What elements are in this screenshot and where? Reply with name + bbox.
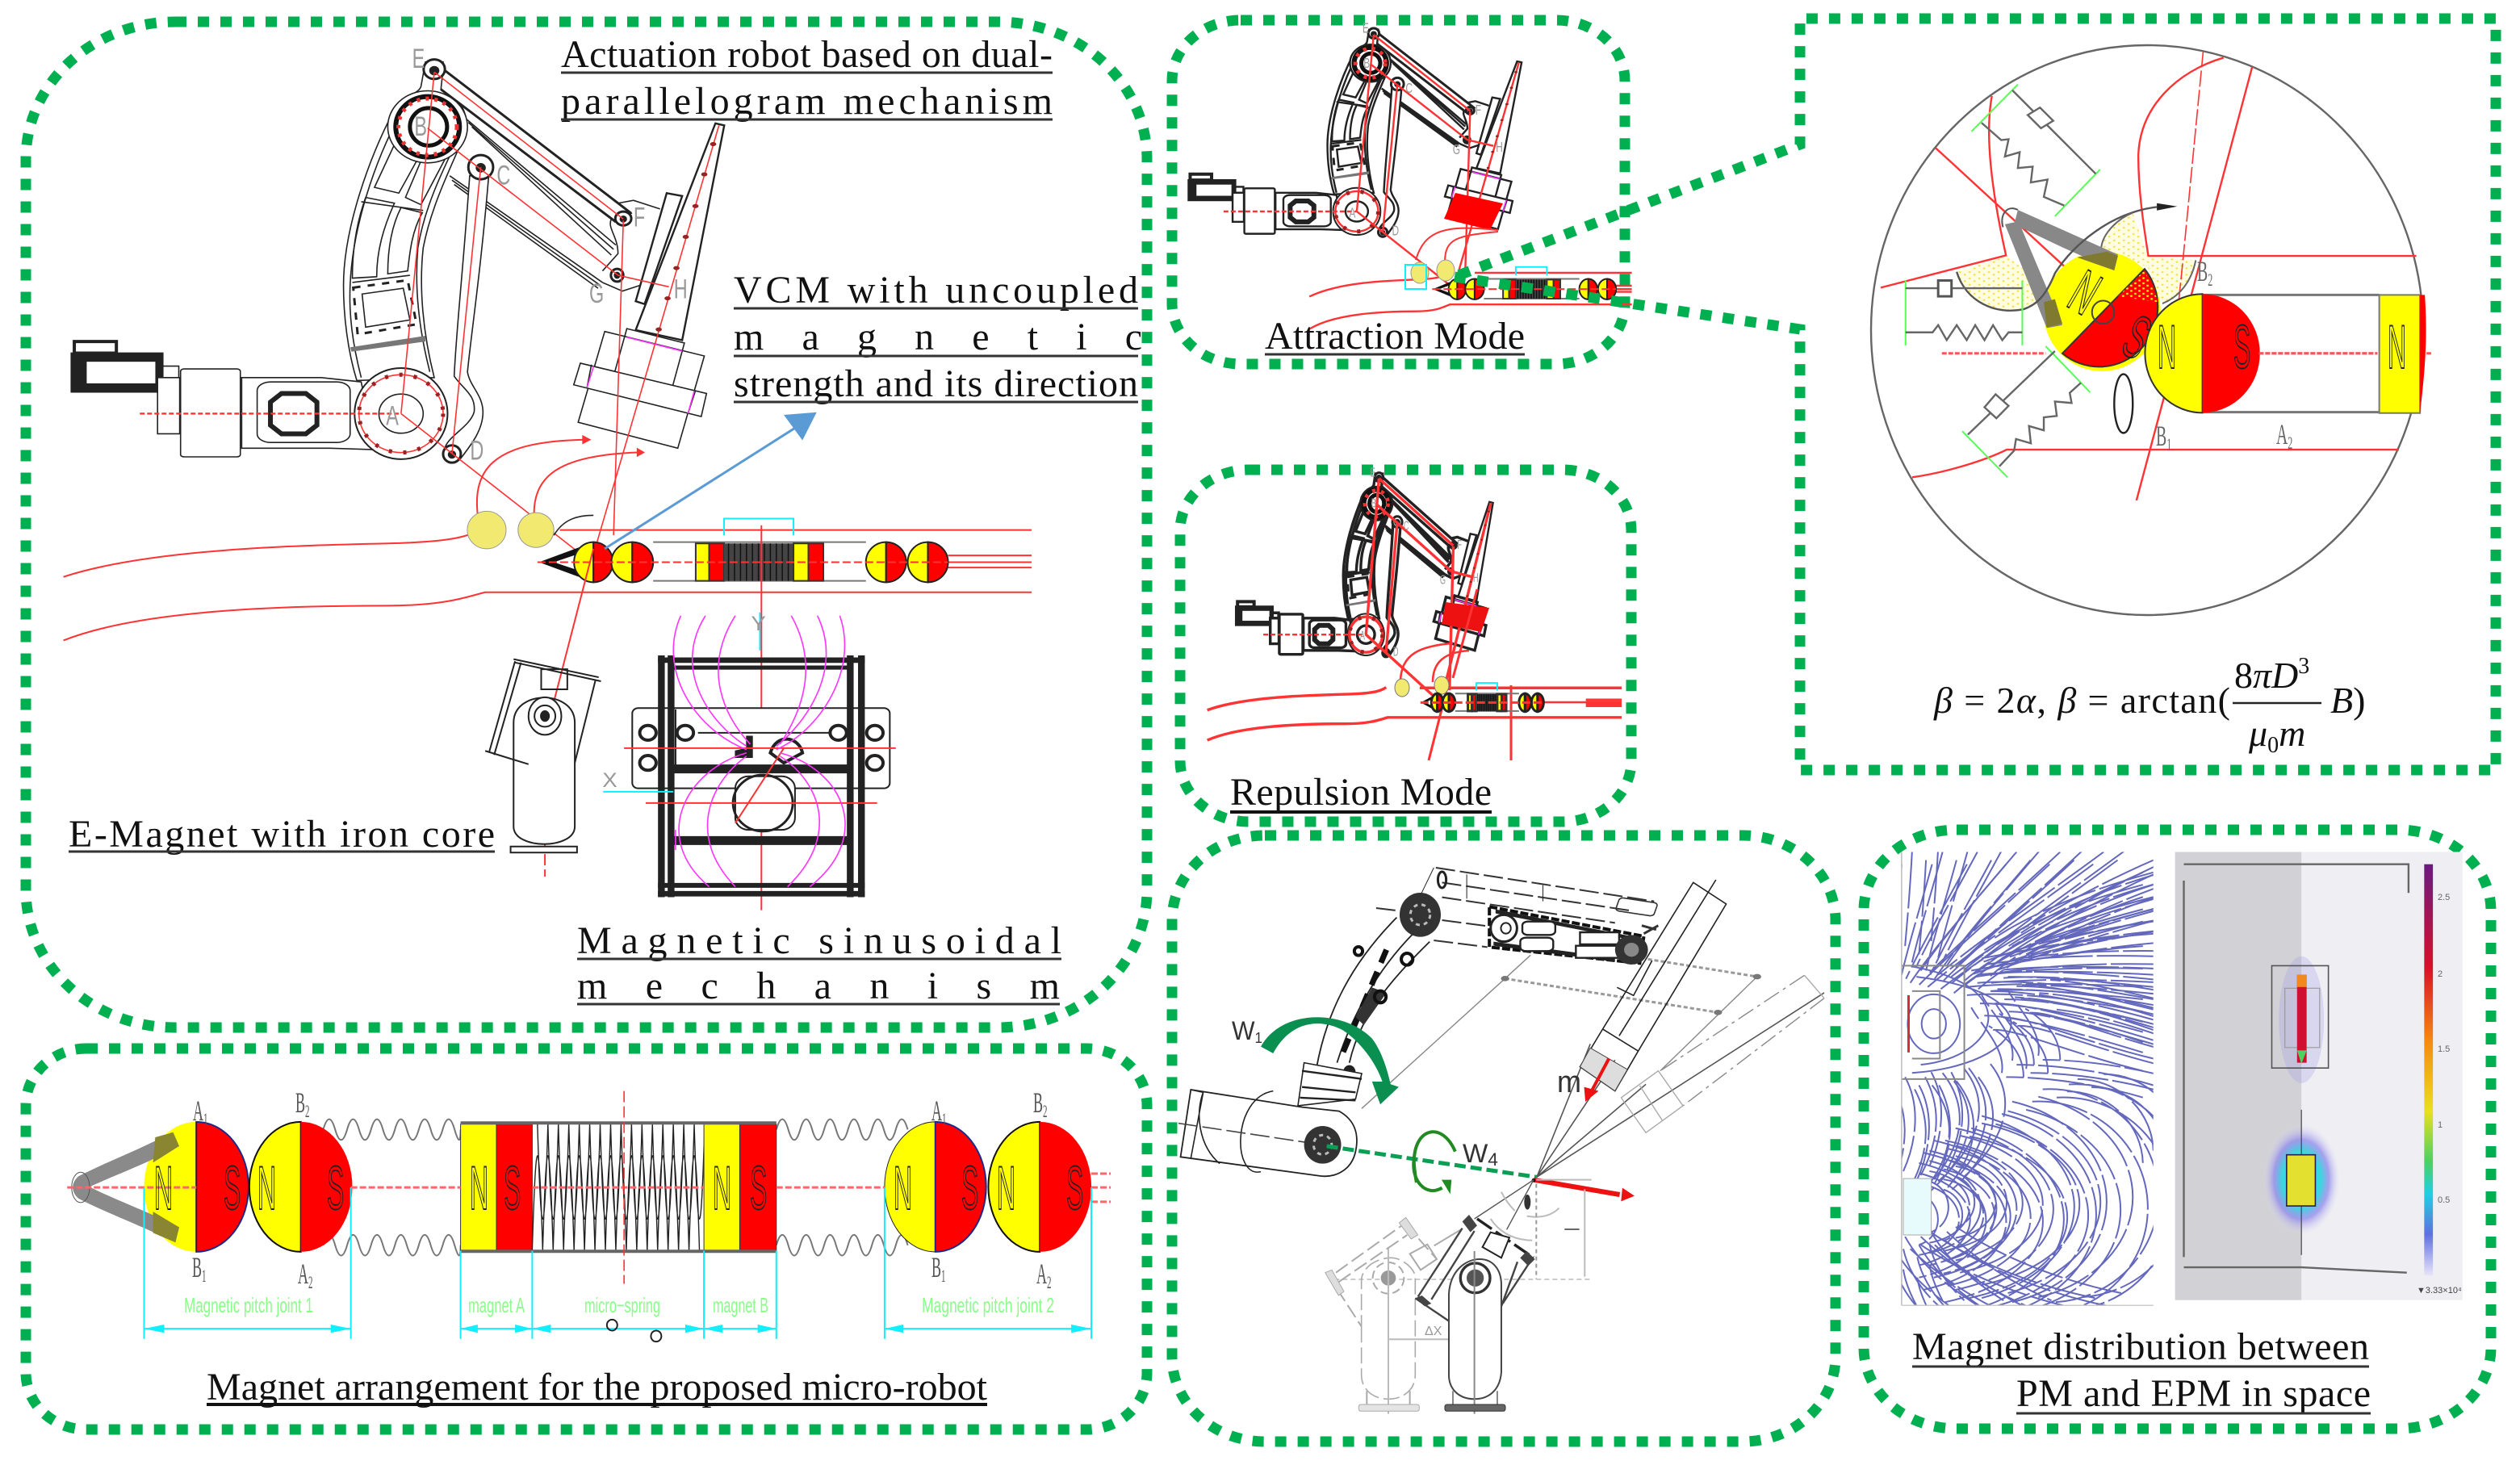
pole letters: S: [224, 1154, 241, 1223]
label: sinusoidal mechanism: [577, 919, 1061, 1007]
colour bar ticks: 2.5: [2438, 893, 2450, 902]
symbol labels: W: [1463, 1139, 1487, 1168]
robot arm, repulsion: [1237, 465, 1493, 699]
joint letters: 2: [1047, 1273, 1051, 1292]
joint letters: A: [1036, 1259, 1047, 1291]
catheter tube rails: [64, 529, 1032, 640]
micro-robot: [538, 519, 948, 582]
formula: 3: [2298, 654, 2309, 679]
field intensity plot: [2175, 852, 2463, 1300]
label: sinusoidal mechanism: mechanism: [577, 965, 1060, 1007]
pole letters: S: [327, 1154, 344, 1223]
symbol labels: ΔX: [1425, 1325, 1442, 1338]
blue arrow towards VCM label: [605, 412, 817, 549]
label: VCM: [734, 269, 1142, 405]
panel: magnet arrangement: [26, 1049, 1147, 1429]
callout joint letters: B: [2156, 421, 2166, 453]
formula: m: [2279, 713, 2305, 754]
joint letters: A: [931, 1096, 942, 1128]
dimension labels: magnet B: [713, 1293, 768, 1317]
callout joint letters: B: [2197, 256, 2208, 288]
pole letters: N: [470, 1154, 488, 1223]
magnetic sinusoidal mechanism: Y: [751, 612, 766, 635]
joint letters: [192, 1088, 1051, 1292]
label: magnet distribution: Magnet distribution between: [1912, 1325, 2369, 1368]
callout pole letters: S: [2233, 313, 2250, 382]
colour bar ticks: ▼3.33×10⁴: [2417, 1286, 2462, 1295]
joint letters: B: [192, 1253, 202, 1284]
panel: attraction mode: [1172, 20, 1632, 364]
joint letters: 1: [941, 1266, 946, 1286]
dimension labels: magnet A: [468, 1293, 525, 1317]
joint letters: A: [193, 1096, 203, 1128]
micro-robot, attraction: [1432, 267, 1616, 299]
colour bar ticks: [2417, 893, 2462, 1295]
label: magnet distribution: PM and EPM in space: [2016, 1372, 2371, 1415]
pole letters: N: [713, 1154, 731, 1223]
ports and arrows, attraction: [1405, 228, 1498, 289]
label: VCM: magnetic: [734, 316, 1142, 358]
joint letters: 2: [305, 1102, 310, 1121]
label: actuation robot: [561, 33, 1053, 123]
joint letters: B: [295, 1088, 305, 1120]
joint letters: 1: [203, 1110, 207, 1129]
joint letters: B: [1033, 1088, 1043, 1120]
label: actuation robot: parallelogram mechanism: [561, 80, 1053, 123]
dimension labels: micro−spring: [584, 1293, 660, 1317]
label: attraction mode: Attraction Mode: [1265, 315, 1525, 358]
label: actuation robot: Actuation robot based on dual-: [561, 33, 1053, 76]
panel: rotated kinematics: [1172, 835, 1836, 1442]
panel: actuation robot: [26, 22, 1147, 1028]
label: VCM: VCM with uncoupled: [734, 269, 1138, 312]
callout pole letters: N: [2388, 313, 2406, 382]
formula: β = 2α, β = arctan(: [1933, 680, 2230, 721]
callout pole letters: N: [2158, 313, 2176, 382]
joint letters: B: [931, 1253, 941, 1284]
pole letters: [154, 1154, 1083, 1223]
magnified joint circle: [1871, 45, 2423, 615]
red electromagnet, repulsion: [1442, 602, 1489, 632]
label: E-magnet: E-Magnet with iron core: [69, 813, 495, 856]
magnet arrangement diagram: [67, 1091, 1111, 1342]
pole letters: S: [1066, 1154, 1083, 1223]
E-magnet with iron core assembly: [485, 659, 601, 852]
upper pose diagram: [1178, 868, 1824, 1182]
label: VCM: strength and its direction: [734, 362, 1138, 405]
tube rails, attraction: [1309, 272, 1632, 329]
joint letters: 2: [1043, 1102, 1048, 1121]
label: sinusoidal mechanism: Magnetic sinusoidal: [577, 919, 1061, 962]
callout pole letters: N: [2058, 257, 2112, 328]
formula: 0: [2267, 733, 2279, 758]
pole letters: N: [154, 1154, 173, 1223]
callout joint letters: [2156, 256, 2292, 454]
colour bar ticks: 1: [2438, 1120, 2443, 1130]
ports, arrows and axis lines, repulsion: [1395, 589, 1622, 760]
panel: repulsion mode: [1180, 465, 1631, 822]
pole letters: N: [894, 1154, 912, 1223]
formula: 8πD: [2234, 655, 2298, 696]
joint letters: 1: [202, 1266, 207, 1286]
pole letters: S: [504, 1154, 521, 1223]
magnetic sinusoidal mechanism: X: [602, 768, 617, 792]
joint detail: [1701, 52, 2431, 500]
colour bar ticks: 0.5: [2438, 1195, 2450, 1205]
magnetic sinusoidal mechanism: [602, 612, 896, 897]
callout pole letters: S: [2113, 302, 2161, 373]
tube rails, repulsion: [1208, 687, 1622, 740]
formula: [1933, 654, 2365, 758]
micro-robot, repulsion: [1421, 683, 1543, 712]
yellow port circles with curved red arrows: [467, 435, 645, 549]
joint letters: 1: [942, 1110, 946, 1129]
joint letters: A: [298, 1259, 308, 1291]
formula: μ: [2248, 713, 2267, 754]
colour bar ticks: 1.5: [2438, 1044, 2450, 1054]
dimension labels: Magnetic pitch joint 1: [184, 1293, 313, 1317]
lower pose diagram: [1325, 1160, 1635, 1414]
callout joint letters: A: [2276, 419, 2288, 451]
panel: magnet distribution: [1864, 830, 2491, 1429]
callout pole letters: [2058, 257, 2406, 382]
robot arm: [71, 44, 724, 555]
robot arm, attraction: [1188, 20, 1522, 285]
red magnet axis lines: [545, 525, 761, 910]
panel: bending moment callout: [1455, 19, 2496, 770]
symbol labels: m: [1557, 1065, 1581, 1099]
pole letters: S: [750, 1154, 767, 1223]
streamline plot: [1901, 852, 2154, 1306]
callout joint letters: 2: [2288, 433, 2292, 453]
label: repulsion mode: Repulsion Mode: [1230, 771, 1492, 814]
label: magnet arrangement: Magnet arrangement for the proposed micro-robot: [207, 1366, 988, 1408]
label: magnet distribution: [1912, 1325, 2371, 1415]
joint letters: 2: [308, 1273, 312, 1292]
callout joint letters: 1: [2166, 434, 2171, 454]
pole letters: N: [997, 1154, 1015, 1223]
red electromagnet: [1444, 193, 1503, 230]
formula: B): [2330, 680, 2365, 721]
symbol labels: [1232, 1016, 1581, 1338]
pole letters: N: [257, 1154, 276, 1223]
symbol labels: 1: [1255, 1030, 1262, 1046]
colour bar ticks: 2: [2438, 969, 2443, 979]
pole letters: S: [961, 1154, 978, 1223]
symbol labels: W: [1232, 1016, 1256, 1045]
symbol labels: 4: [1488, 1149, 1498, 1170]
dimension labels: [184, 1293, 1054, 1317]
callout joint letters: 2: [2208, 270, 2212, 290]
dimension labels: Magnetic pitch joint 2: [922, 1293, 1054, 1317]
